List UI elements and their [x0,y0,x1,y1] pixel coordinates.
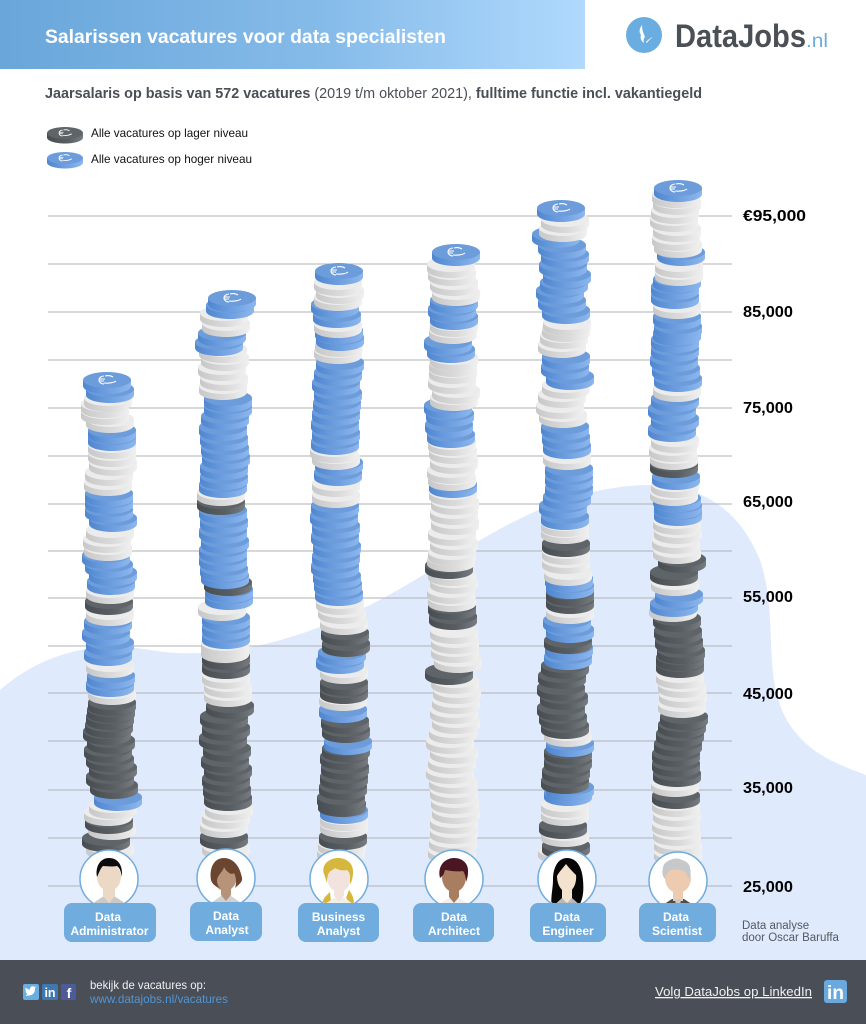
footer link: LinkedIn: Volg DataJobs op LinkedIn [655,984,812,999]
icon: facebook [61,984,76,1001]
credit: Data analyse [742,920,809,932]
job label: Data Engineer: Engineer [542,924,594,938]
job label: Data Analyst [190,902,262,941]
job label: Data Engineer: Data [554,910,580,924]
salary axis labels: 65,000 [743,494,793,511]
job label: Business Analyst: Analyst [317,924,360,938]
icon: linkedin large: in [827,983,844,1004]
salary axis labels: €95,000 [743,208,806,225]
person: Data Analyst [197,849,255,911]
person: Data Architect [425,850,483,912]
footer [0,960,866,1024]
salary axis labels: 75,000 [743,400,793,417]
footer text: vacatures link [89,978,228,1006]
person: Data Administrator [80,850,138,911]
job label: Data Architect: Architect [428,924,480,938]
salary axis labels: 35,000 [743,780,793,797]
job label: Business Analyst [298,903,379,942]
salary axis labels: 55,000 [743,589,793,606]
job label: Data Administrator [64,903,156,942]
coin stack: Data Engineer [532,200,594,864]
subtitle: Jaarsalaris op basis van 572 vacatures (2019 t/m oktober 2021), fulltime functie incl. vakantiegeld [45,85,702,102]
footer text: vacatures link: www.datajobs.nl/vacatures [89,992,228,1006]
coin stack: Data Administrator [81,372,142,860]
icon: facebook: f [67,985,72,1001]
job label: Data Engineer [530,903,606,942]
job label: Data Architect: Data [441,910,467,924]
person: Business Analyst [310,850,368,912]
legend item: lager niveau: Alle vacatures op lager niveau [91,126,248,140]
job label: Business Analyst: Business [312,910,366,924]
legend item: lager niveau [47,126,248,144]
legend [47,126,252,168]
legend item: hoger niveau: Alle vacatures op hoger niveau [91,152,252,166]
logo: DataJobs.nl: DataJobs [675,18,806,54]
header banner [0,0,585,69]
coin stack: Data Architect [424,244,482,864]
salary axis labels [743,208,806,896]
icon: linkedin [42,984,58,1000]
job label: Data Architect [413,903,494,942]
background blob [0,485,866,960]
person: Data Engineer [538,850,596,912]
icon: linkedin large [824,980,847,1004]
job label: Data Analyst: Analyst [205,923,249,937]
credit: door Oscar Baruffa [742,932,840,944]
salary axis labels: 25,000 [743,879,793,896]
person: Data Scientist [648,851,708,903]
job label: Data Analyst: Data [213,909,239,923]
job label: Data Administrator: Data [95,910,121,924]
job label: Data Scientist: Data [663,910,689,924]
coin stack: Data Scientist [648,180,708,866]
salary axis labels: 45,000 [743,686,793,703]
coin stack: Business Analyst [310,263,372,864]
logo: DataJobs.nl: .nl [806,31,828,52]
legend item: hoger niveau [47,152,252,168]
job label: Data Administrator: Administrator [70,924,149,938]
icon: twitter [23,984,39,1000]
footer text: vacatures link: bekijk de vacatures op: [90,978,206,992]
logo: DataJobs.nl [626,17,828,54]
icon: linkedin: in [44,986,56,1000]
job label: Data Scientist: Scientist [652,924,702,938]
salary axis labels: 85,000 [743,304,793,321]
title: Salarissen vacatures voor data specialisten [45,27,446,48]
coin stack: Data Analyst [195,290,256,860]
job label: Data Scientist [639,903,716,942]
